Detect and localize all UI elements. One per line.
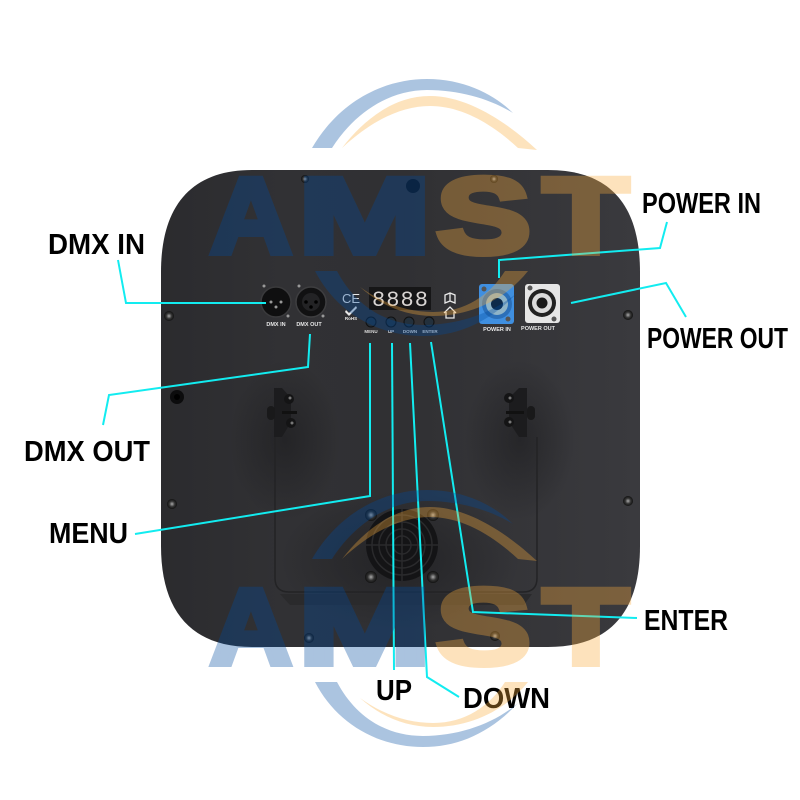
- watermark: top AMST logo: A: [210, 156, 292, 276]
- device panel: [161, 170, 640, 647]
- DMX IN connector: DMX IN: [266, 322, 286, 328]
- label: UP: UP: [376, 675, 412, 707]
- watermark: bottom AMST logo: A: [210, 567, 292, 687]
- watermark: top AMST logo: [210, 79, 629, 336]
- DMX OUT connector: [296, 284, 326, 328]
- label: DOWN: DOWN: [463, 683, 550, 715]
- cyan leader lines: [103, 222, 686, 697]
- label: ENTER: ENTER: [644, 605, 728, 637]
- watermark: bottom AMST logo: T: [543, 567, 629, 687]
- left bracket: [267, 388, 297, 437]
- right bracket: [504, 388, 535, 437]
- handle recess outline: [275, 437, 537, 605]
- label: DMX IN: DMX IN: [48, 229, 145, 261]
- labels: [24, 188, 788, 715]
- control buttons: ENTER: [422, 329, 438, 334]
- control buttons: DOWN: [403, 329, 417, 334]
- label: MENU: MENU: [49, 518, 128, 550]
- fan grille: [365, 509, 439, 583]
- control buttons: [364, 317, 438, 334]
- DMX IN connector: [261, 284, 291, 328]
- control buttons: MENU: [364, 329, 378, 334]
- watermark: bottom AMST logo: M: [298, 567, 431, 687]
- control buttons: UP: [388, 329, 394, 334]
- watermark: bottom AMST logo: [210, 490, 629, 747]
- POWER IN connector: [479, 284, 514, 333]
- CE and RoHS marks: RoHS: [345, 316, 357, 321]
- CE and RoHS marks: CE: [342, 291, 360, 306]
- POWER OUT connector: POWER OUT: [521, 326, 556, 332]
- watermark: top AMST logo: T: [543, 156, 629, 276]
- LED display: 8888: [372, 288, 428, 313]
- CE and RoHS marks: [342, 291, 360, 321]
- label: DMX OUT: DMX OUT: [24, 436, 150, 468]
- watermark: bottom AMST logo: S: [436, 567, 531, 687]
- label: POWER IN: POWER IN: [642, 188, 761, 220]
- watermark: top AMST logo: S: [436, 156, 531, 276]
- POWER OUT connector: [521, 284, 560, 332]
- watermark: top AMST logo: M: [298, 156, 431, 276]
- panel screws: [164, 175, 633, 643]
- map and home icons: [444, 293, 456, 318]
- POWER IN connector: POWER IN: [483, 327, 511, 333]
- DMX OUT connector: DMX OUT: [296, 322, 322, 328]
